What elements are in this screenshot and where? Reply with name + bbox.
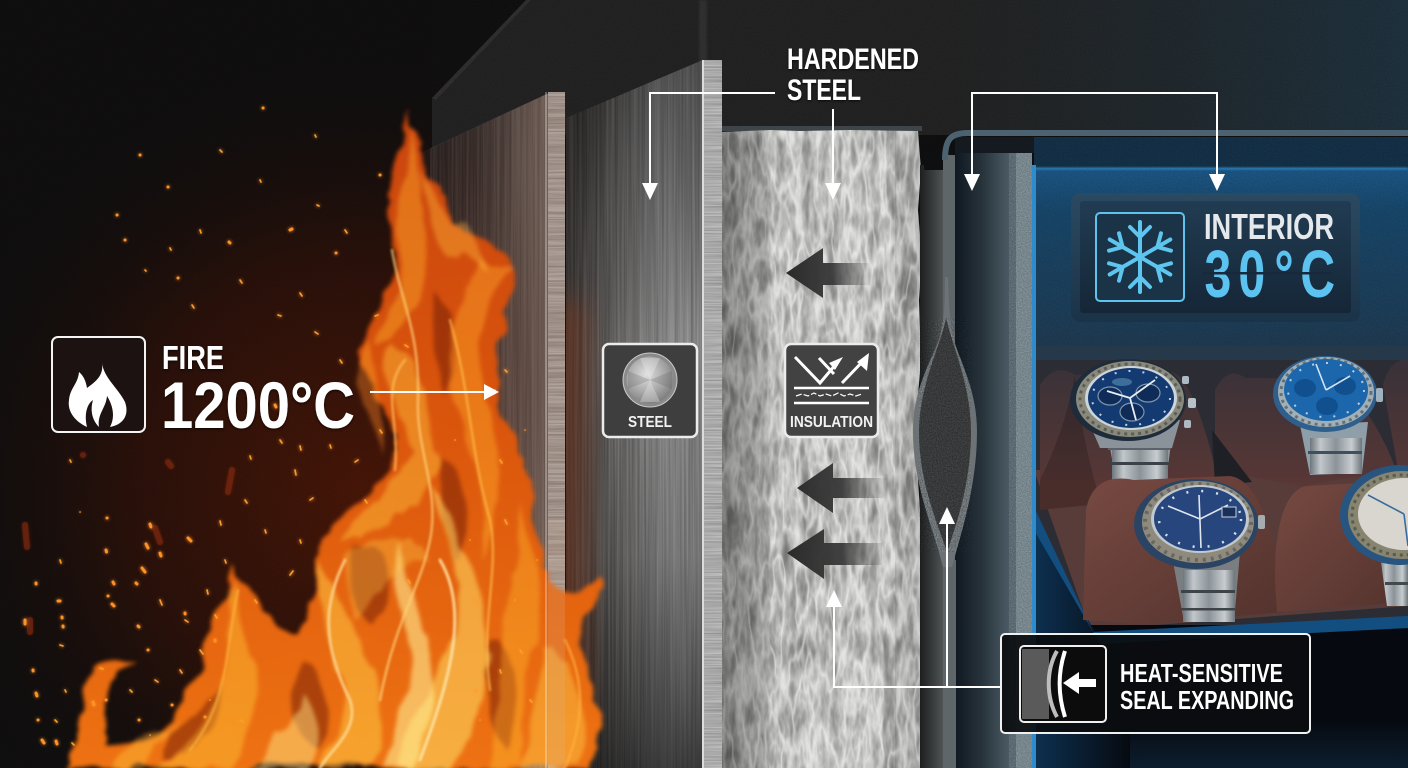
- label: heat-sensitive seal expanding: HEAT-SENSITIVE: [1120, 658, 1283, 688]
- heading: interior: INTERIOR: [1204, 206, 1334, 247]
- heading: hardened steel: [787, 43, 919, 107]
- value: 30°C: 30°C: [1205, 237, 1335, 312]
- pillow: front right: [1275, 484, 1386, 612]
- arrow: to steel plate: [642, 93, 775, 200]
- watch: top left: [1070, 359, 1196, 482]
- callout: fire 1200°C: [52, 337, 499, 442]
- panel: seal channel and inner wall: [920, 133, 1408, 768]
- arrow: to inner wall and interior: [964, 93, 1225, 191]
- heading: hardened steel: STEEL: [787, 74, 861, 107]
- label: insulation: INSULATION: [790, 414, 873, 431]
- flame shadows: [165, 290, 517, 760]
- blue edge light: [1032, 165, 1036, 768]
- watch: front centre: [1134, 479, 1265, 622]
- icon: flame badge: [52, 337, 145, 432]
- heading: hardened steel: HARDENED: [787, 43, 919, 76]
- seal gasket expanding: [913, 277, 977, 768]
- panel: interior compartment: [1032, 137, 1408, 768]
- arrow: heat flow upper: [786, 248, 872, 298]
- embers and sparks: [25, 108, 537, 745]
- label: heat-sensitive seal expanding: SEAL EXPANDING: [1120, 685, 1294, 715]
- heading: fire: FIRE: [162, 339, 224, 376]
- background: fire glow: [0, 40, 620, 768]
- badge: insulation: [785, 344, 878, 437]
- arrow: to insulation: [825, 109, 841, 200]
- label: steel: STEEL: [628, 414, 672, 431]
- callout: heat-sensitive seal: [826, 507, 1310, 733]
- watch tray: [1034, 360, 1408, 768]
- badge: steel: [603, 344, 697, 437]
- arrow: seal leaders: [826, 507, 1001, 687]
- arrow: heat toward steel: [370, 384, 499, 400]
- pillow: top row: [1040, 360, 1408, 510]
- background: grain: [0, 0, 560, 768]
- watch: front right: [1340, 465, 1408, 606]
- arrow: heat flow middle: [797, 463, 888, 513]
- icon: snowflake: [1096, 213, 1184, 301]
- flames: [70, 92, 600, 768]
- steel edge seen through flame: [545, 92, 547, 768]
- label: heat-sensitive seal expanding: [1120, 658, 1294, 715]
- icon: brushed steel disc: [623, 353, 677, 407]
- panel: interior temperature readout: [1071, 193, 1360, 322]
- arrow: heat flow lower: [787, 529, 882, 579]
- pillow: front left: [1083, 476, 1283, 624]
- panel: fibrous insulation: [722, 130, 922, 768]
- panel: inner hardened steel plate: [566, 60, 722, 768]
- watch: top right: [1273, 356, 1383, 475]
- charcoal safe body top: [432, 0, 1408, 148]
- icon: heat reflected through layers: [794, 353, 869, 403]
- panel: outer steel plate: [424, 92, 565, 768]
- value: 1200°C: 1200°C: [161, 368, 355, 442]
- icon: seal expanding: [1020, 646, 1106, 722]
